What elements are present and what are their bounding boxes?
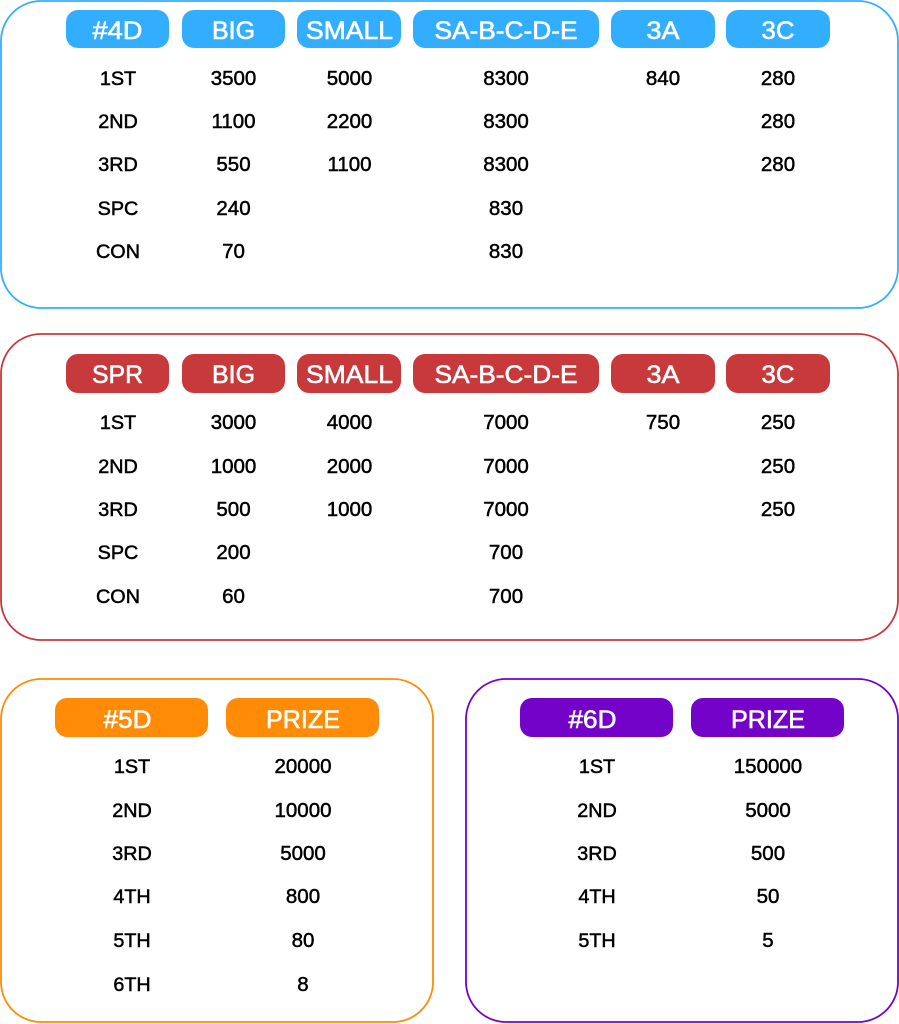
4D prize table: 1ST xyxy=(100,68,136,90)
SPR prize table: 2000 xyxy=(327,455,372,478)
panel: 5D prizes xyxy=(1,679,433,1022)
SPR prize table: CON xyxy=(96,586,140,608)
5D prize table: 3RD xyxy=(112,843,152,865)
SPR prize table: 4000 xyxy=(327,411,372,434)
5D header row: #5D xyxy=(104,706,152,734)
4D prize table: 1100 xyxy=(211,110,256,133)
5D prize table: 4TH xyxy=(113,886,151,908)
5D prize table: 6TH xyxy=(113,974,151,996)
6D prize table: 3RD xyxy=(577,843,617,865)
6D prize table: 5TH xyxy=(578,930,616,952)
SPR header row: 3A xyxy=(646,361,680,389)
6D prize table: 2ND xyxy=(577,800,617,822)
SPR prize table: 250 xyxy=(761,411,795,434)
5D prize table: 80 xyxy=(292,929,314,952)
4D prize table: 3500 xyxy=(211,67,256,90)
SPR prize table: SPC xyxy=(98,542,138,564)
6D header row: PRIZE xyxy=(731,706,805,734)
4D prize table xyxy=(96,67,795,263)
6D prize table: 150000 xyxy=(734,755,802,778)
SPR header row: SPR xyxy=(92,361,143,389)
4D prize table: 8300 xyxy=(483,67,529,90)
SPR prize table: 7000 xyxy=(483,498,529,521)
SPR prize table: 250 xyxy=(761,455,795,478)
5D prize table: 2ND xyxy=(112,800,152,822)
SPR prize table: 1ST xyxy=(100,412,136,434)
4D header row: 3A xyxy=(646,17,680,45)
5D prize table: 5TH xyxy=(113,930,151,952)
6D prize table: 5000 xyxy=(745,799,791,822)
SPR prize table: 1000 xyxy=(327,498,372,521)
5D header row: PRIZE xyxy=(266,706,340,734)
4D prize table: 1100 xyxy=(327,153,372,176)
6D header row xyxy=(520,698,844,737)
4D prize table: SPC xyxy=(98,198,138,220)
6D prize table xyxy=(577,755,802,952)
5D prize table xyxy=(112,755,332,996)
SPR prize table: 700 xyxy=(489,541,523,564)
SPR prize table: 3000 xyxy=(211,411,256,434)
4D prize table: 8300 xyxy=(483,110,529,133)
4D prize table: CON xyxy=(96,241,140,263)
5D prize table: 5000 xyxy=(280,842,326,865)
4D prize table: 240 xyxy=(216,197,251,220)
panel: 4D prizes xyxy=(1,1,898,308)
SPR prize table: 7000 xyxy=(483,411,529,434)
4D prize table: 280 xyxy=(761,153,795,176)
panel: 6D prizes xyxy=(466,679,898,1022)
4D prize table: 3RD xyxy=(98,154,138,176)
SPR prize table: 60 xyxy=(222,585,245,608)
SPR prize table: 2ND xyxy=(98,456,138,478)
SPR prize table: 500 xyxy=(216,498,251,521)
4D prize table: 840 xyxy=(646,67,680,90)
4D prize table: 2ND xyxy=(98,111,138,133)
4D header row: 3C xyxy=(762,17,794,45)
6D prize table: 50 xyxy=(757,885,779,908)
6D header row: #6D xyxy=(568,706,616,734)
5D header row xyxy=(55,698,379,737)
4D header row: #4D xyxy=(92,17,142,45)
4D prize table: 830 xyxy=(489,240,523,263)
SPR prize table xyxy=(96,411,795,608)
6D prize table: 4TH xyxy=(578,886,616,908)
5D prize table: 1ST xyxy=(114,756,150,778)
5D prize table: 8 xyxy=(297,973,309,996)
SPR prize table: 7000 xyxy=(483,455,529,478)
4D header row: SA-B-C-D-E xyxy=(434,17,578,45)
4D prize table: 830 xyxy=(489,197,523,220)
6D prize table: 1ST xyxy=(579,756,615,778)
4D prize table: 2200 xyxy=(327,110,372,133)
4D prize table: 8300 xyxy=(483,153,529,176)
4D prize table: 5000 xyxy=(327,67,372,90)
4D header row: BIG xyxy=(212,17,255,45)
SPR header row xyxy=(66,354,830,393)
SPR prize table: 700 xyxy=(489,585,523,608)
4D prize table: 280 xyxy=(761,67,795,90)
SPR prize table: 3RD xyxy=(98,499,138,521)
6D prize table: 5 xyxy=(762,929,774,952)
SPR header row: SA-B-C-D-E xyxy=(434,361,578,389)
5D prize table: 10000 xyxy=(274,799,332,822)
SPR prize table: 1000 xyxy=(211,455,256,478)
6D prize table: 500 xyxy=(751,842,785,865)
SPR header row: 3C xyxy=(762,361,794,389)
5D prize table: 20000 xyxy=(274,755,332,778)
SPR prize table: 200 xyxy=(216,541,251,564)
4D prize table: 280 xyxy=(761,110,795,133)
panel: SPR prizes xyxy=(1,334,898,640)
SPR header row: BIG xyxy=(212,361,255,389)
4D header row xyxy=(66,10,830,48)
SPR prize table: 250 xyxy=(761,498,795,521)
SPR header row: SMALL xyxy=(306,361,393,389)
4D prize table: 550 xyxy=(216,153,251,176)
SPR prize table: 750 xyxy=(646,411,680,434)
4D header row: SMALL xyxy=(306,17,393,45)
4D prize table: 70 xyxy=(222,240,245,263)
5D prize table: 800 xyxy=(286,885,320,908)
